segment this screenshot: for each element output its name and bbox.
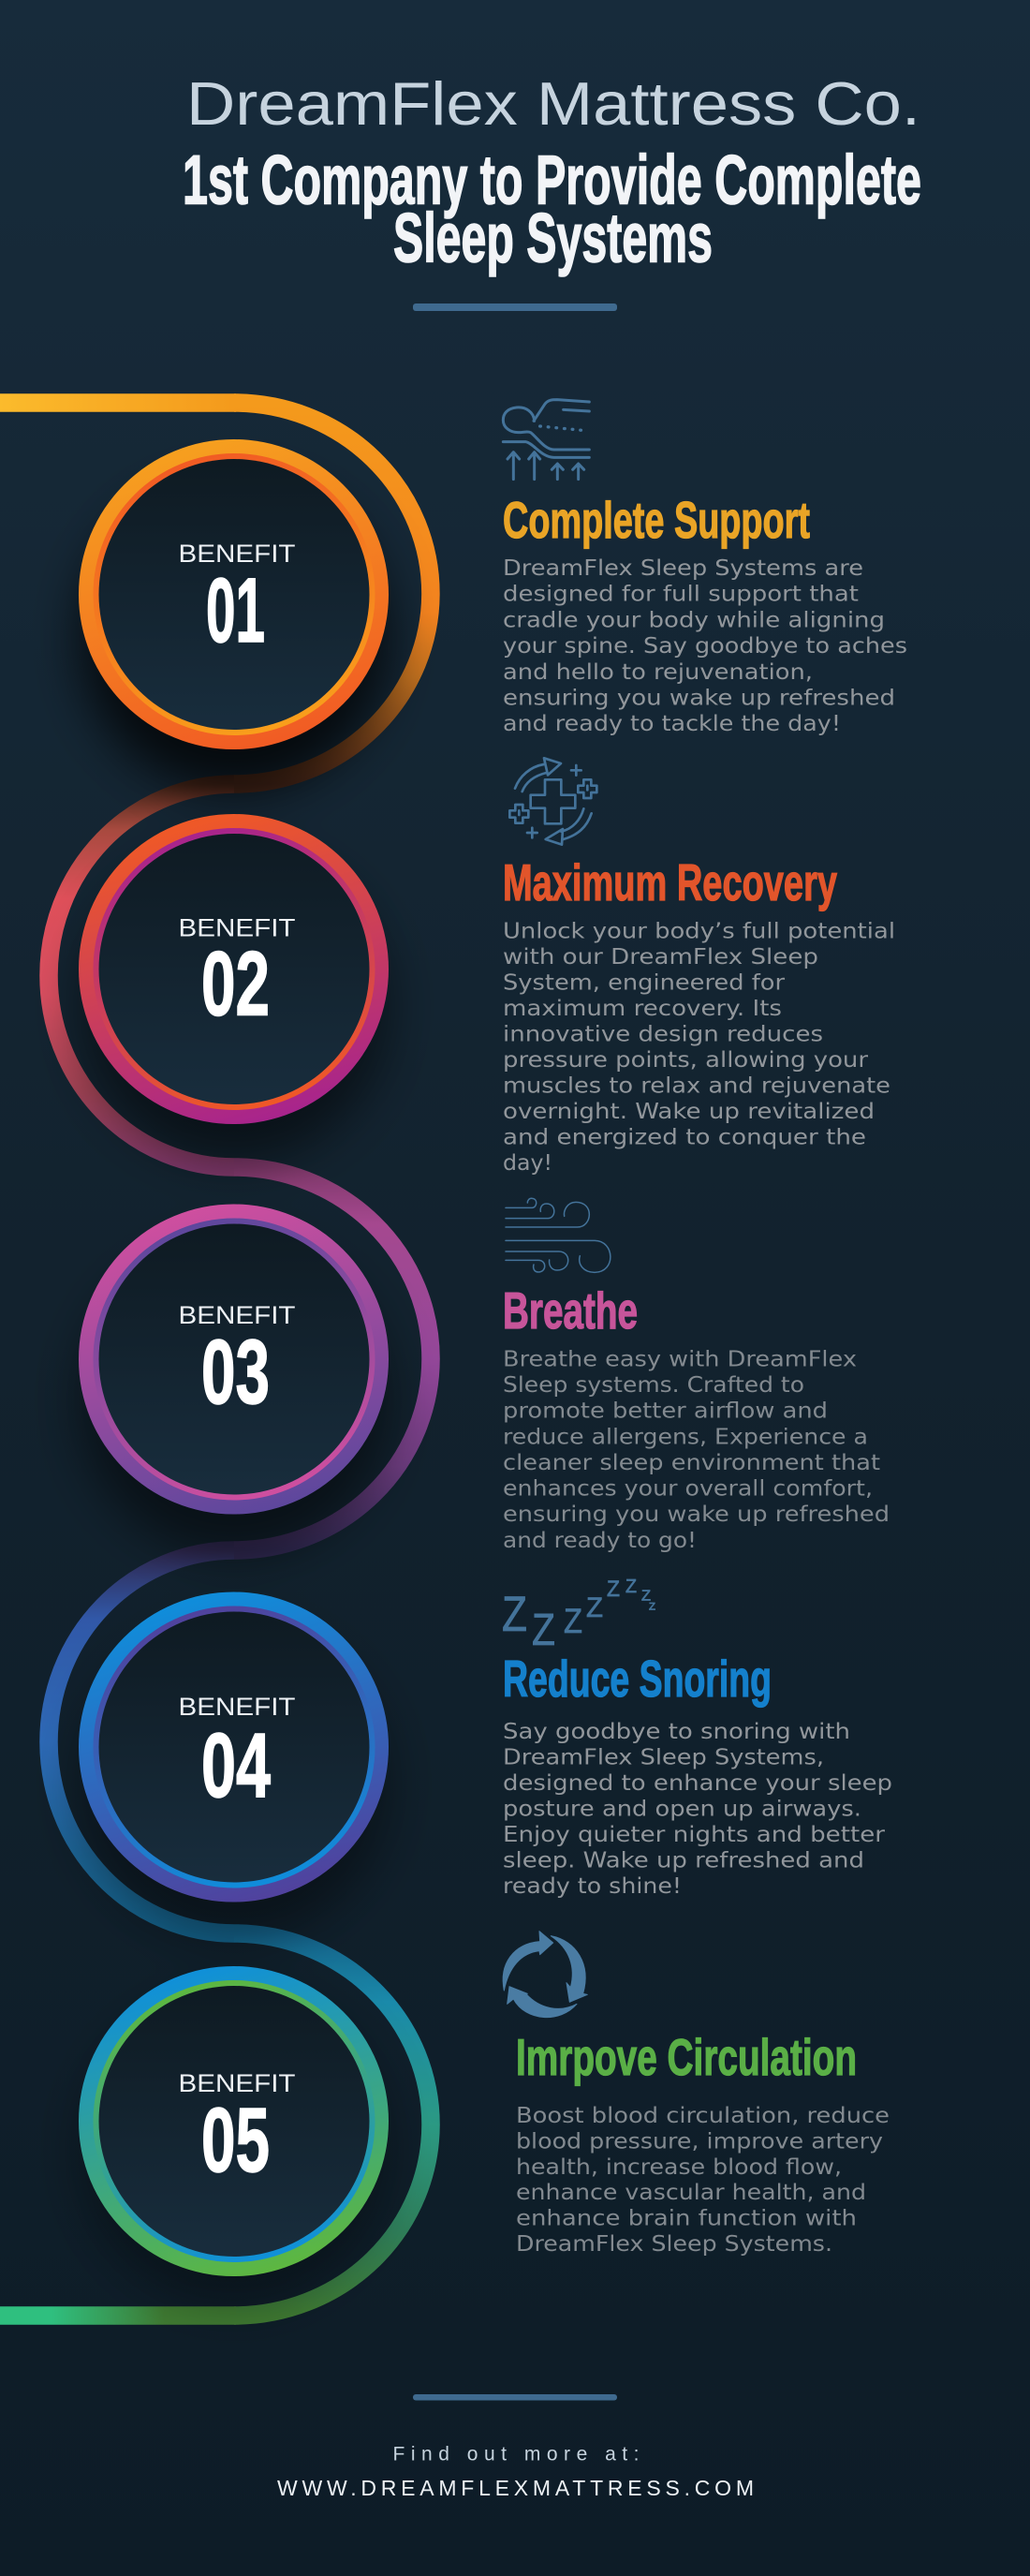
heading: Reduce Snoring bbox=[503, 1650, 772, 1708]
badge: benefit 02: 02 bbox=[201, 933, 270, 1034]
icon: sleeping z letters: Z bbox=[607, 1577, 620, 1602]
winding ribbon bbox=[0, 403, 431, 2316]
panel: complete support bbox=[503, 400, 907, 736]
website: WWW.DREAMFLEXMATTRESS.COM bbox=[277, 2476, 754, 2500]
body text: with our DreamFlex Sleep bbox=[503, 943, 818, 970]
heading: Breathe bbox=[503, 1281, 638, 1340]
body text: enhance vascular health, and bbox=[516, 2179, 866, 2205]
body text: Breathe easy with DreamFlex bbox=[503, 1345, 857, 1371]
icon: sleeping z letters: Z bbox=[586, 1592, 603, 1623]
heading: Complete Support bbox=[503, 491, 810, 549]
badge: benefit 03: BENEFIT bbox=[178, 1301, 296, 1329]
body text: and hello to rejuvenation, bbox=[503, 659, 813, 685]
icon: sleeping z letters bbox=[502, 1577, 655, 1655]
body text: DreamFlex Sleep Systems, bbox=[503, 1744, 824, 1770]
body text bbox=[503, 555, 907, 736]
badge: benefit 05: BENEFIT bbox=[178, 2069, 296, 2097]
badge: benefit 05: 05 bbox=[201, 2089, 270, 2191]
icon: sleeping z letters: Z bbox=[649, 1602, 655, 1613]
body text: innovative design reduces bbox=[503, 1021, 823, 1047]
body text: DreamFlex Sleep Systems. bbox=[516, 2230, 832, 2257]
body text bbox=[503, 1345, 890, 1553]
panel: breathe bbox=[503, 1198, 890, 1553]
body text bbox=[503, 918, 895, 1176]
icon: sleeping z letters: Z bbox=[564, 1602, 582, 1640]
badge: benefit 04: BENEFIT bbox=[178, 1693, 296, 1721]
badge: benefit 04 bbox=[79, 1592, 389, 1902]
body text: Boost blood circulation, reduce bbox=[516, 2102, 890, 2128]
body text: promote better airflow and bbox=[503, 1398, 828, 1424]
body text: health, increase blood flow, bbox=[516, 2154, 842, 2180]
body text: Say goodbye to snoring with bbox=[503, 1718, 850, 1744]
badge: benefit 01: BENEFIT bbox=[178, 540, 296, 568]
body text: DreamFlex Sleep Systems are bbox=[503, 555, 863, 581]
body text: sleep. Wake up refreshed and bbox=[503, 1847, 864, 1873]
icon: sleeping z letters: Z bbox=[532, 1606, 555, 1655]
icon: circular arrows bbox=[503, 1932, 587, 2018]
body text: pressure points, allowing your bbox=[503, 1046, 868, 1073]
body text: System, engineered for bbox=[503, 969, 785, 995]
body text: enhance brain function with bbox=[516, 2205, 857, 2231]
icon: sleeping z letters: Z bbox=[641, 1589, 651, 1604]
badge: benefit 03 bbox=[79, 1205, 389, 1514]
heading: Maximum Recovery bbox=[503, 853, 837, 911]
title block bbox=[183, 69, 921, 277]
badge: benefit 01: 01 bbox=[206, 559, 265, 661]
body text: Enjoy quieter nights and better bbox=[503, 1821, 885, 1847]
body text: enhances your overall comfort, bbox=[503, 1474, 873, 1501]
body text: cradle your body while aligning bbox=[503, 606, 885, 632]
company name: DreamFlex Mattress Co. bbox=[186, 69, 920, 138]
body text: reduce allergens, Experience a bbox=[503, 1424, 868, 1450]
body text: muscles to relax and rejuvenate bbox=[503, 1072, 890, 1098]
body text: and energized to conquer the bbox=[503, 1124, 866, 1150]
body text: blood pressure, improve artery bbox=[516, 2127, 883, 2154]
top divider bbox=[413, 303, 617, 311]
body text: Unlock your body’s full potential bbox=[503, 918, 895, 944]
body text: ensuring you wake up refreshed bbox=[503, 1501, 890, 1527]
headline: Sleep Systems bbox=[393, 199, 713, 277]
panel: reduce snoring bbox=[502, 1577, 892, 1899]
panel: maximum recovery bbox=[503, 758, 895, 1176]
circle shadows bbox=[80, 482, 389, 2304]
icon: wind bbox=[506, 1198, 611, 1272]
body text: maximum recovery. Its bbox=[503, 995, 782, 1021]
body text: overnight. Wake up revitalized bbox=[503, 1098, 875, 1124]
icon: sleeping z letters: Z bbox=[625, 1577, 637, 1597]
icon: body on mattress bbox=[503, 400, 589, 480]
body text: your spine. Say goodbye to aches bbox=[503, 632, 907, 659]
body text: and ready to tackle the day! bbox=[503, 710, 841, 736]
badge: benefit 04: 04 bbox=[201, 1714, 271, 1816]
body text: Sleep systems. Crafted to bbox=[503, 1371, 804, 1398]
bottom divider bbox=[413, 2394, 617, 2400]
body text bbox=[516, 2102, 890, 2257]
body text bbox=[503, 1718, 892, 1899]
body text: ready to shine! bbox=[503, 1873, 682, 1899]
badge: benefit 02: BENEFIT bbox=[178, 914, 296, 942]
body text: and ready to go! bbox=[503, 1527, 697, 1553]
badge: benefit 01 bbox=[79, 439, 389, 749]
body text: ensuring you wake up refreshed bbox=[503, 684, 895, 710]
headline bbox=[183, 141, 921, 277]
icon: medical cross with arrows bbox=[509, 758, 596, 845]
body text: cleaner sleep environment that bbox=[503, 1449, 880, 1475]
body text: designed to enhance your sleep bbox=[503, 1769, 892, 1796]
body text: posture and open up airways. bbox=[503, 1795, 861, 1821]
badge: benefit 05 bbox=[79, 1966, 389, 2276]
badge: benefit 03: 03 bbox=[201, 1321, 270, 1423]
body text: designed for full support that bbox=[503, 581, 859, 607]
badge: benefit 02 bbox=[79, 814, 389, 1124]
call to action: Find out more at: bbox=[393, 2443, 639, 2465]
icon: sleeping z letters: Z bbox=[502, 1587, 527, 1642]
body text: day! bbox=[503, 1149, 552, 1176]
heading: Imrpove Circulation bbox=[516, 2028, 857, 2086]
panel: improve circulation bbox=[503, 1932, 890, 2257]
footer bbox=[277, 2443, 754, 2500]
